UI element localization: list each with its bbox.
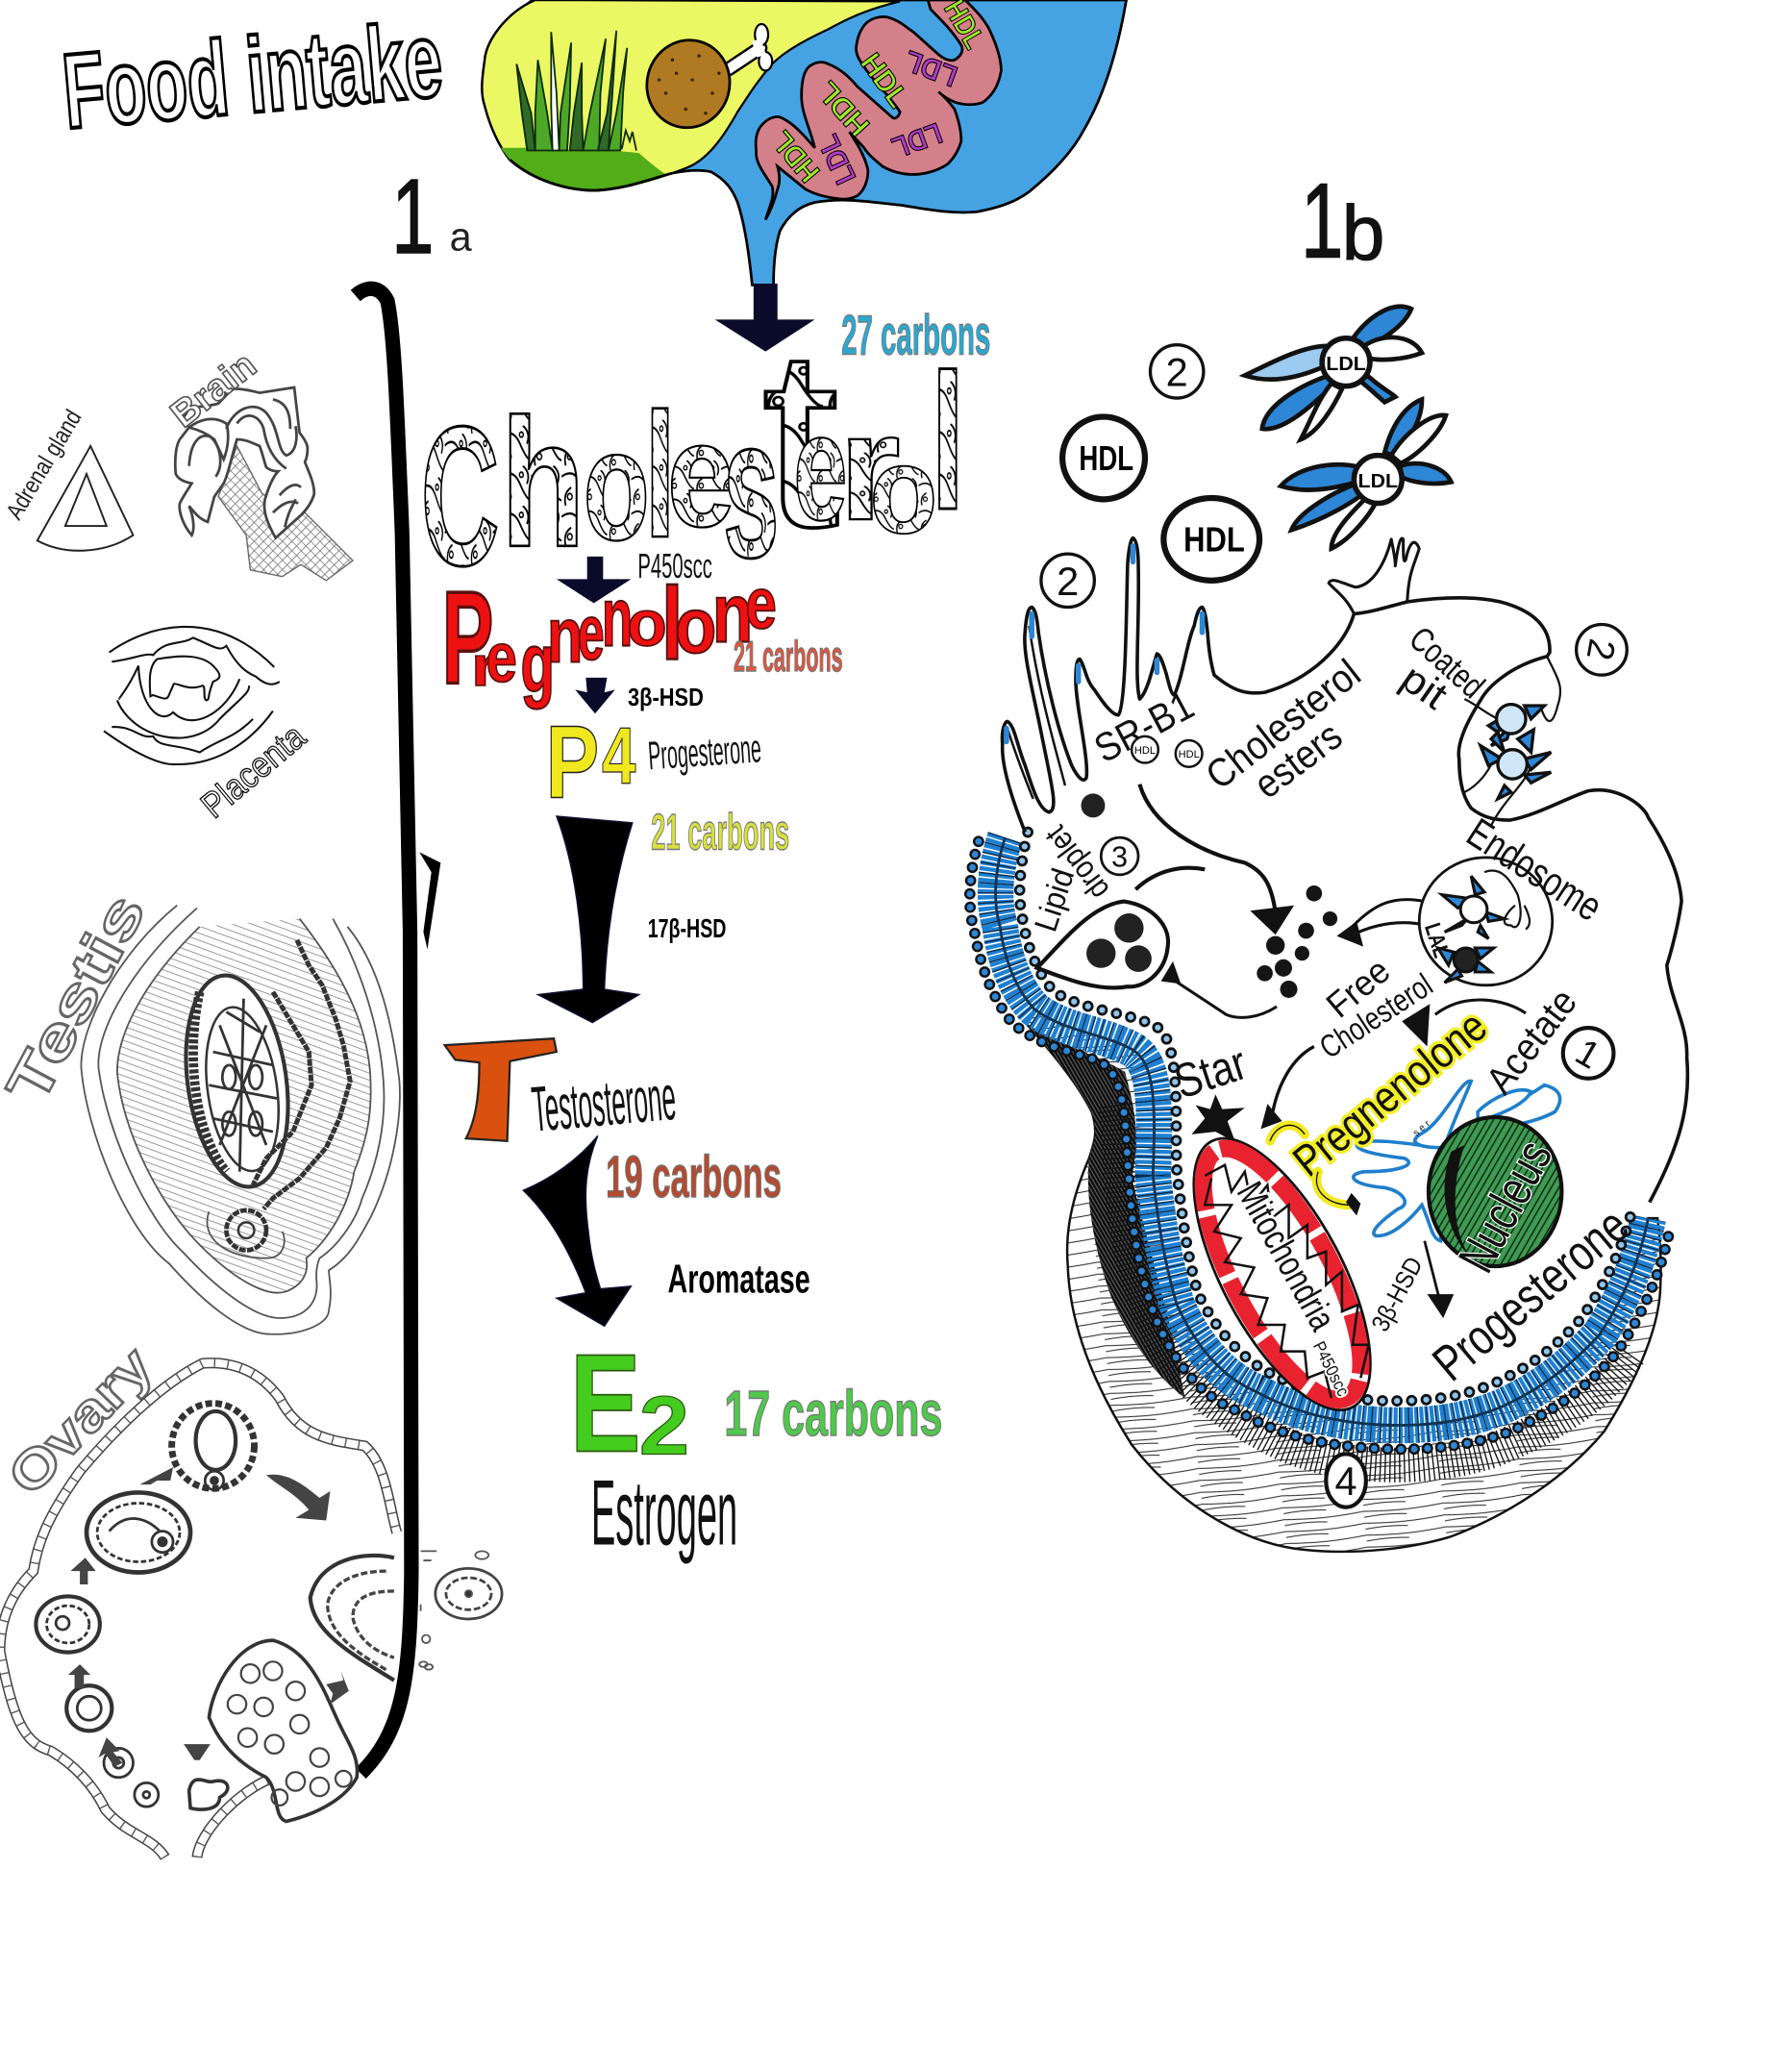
heading: Cholesterol: C [421,386,500,608]
hairy receptor tuft [1329,538,1419,613]
heading: P4: 4 [602,710,635,800]
label: Free Cholesterol: Free [1318,950,1398,1026]
icon: chicken leg [637,24,772,137]
nucleus [1411,1117,1563,1282]
heading: Pregnenolone: l [661,566,683,681]
mitochondrial cristae [1205,1165,1369,1378]
infographic: steroid hormone synthesis: 21 carbons [734,634,843,681]
heading: Pregnenolone: e [578,589,605,677]
number badge 1: 1 [1568,1032,1607,1078]
lipid droplet [1037,902,1168,987]
corpus luteum [209,1640,358,1821]
brain gyri [175,387,314,538]
label: Lipid droplet: Lipid [1028,864,1082,936]
HDL particle [1163,498,1259,581]
heading: Cholesterol: l [931,334,965,550]
number badge 3 [1101,837,1138,875]
heading 1a: a [450,213,473,259]
label: LAL: LAL [1420,920,1455,960]
brain hatched stem [218,446,353,581]
dark hatched shoulder [1025,1023,1185,1398]
label: Star: Star [1168,1035,1253,1109]
tissue: brain [163,344,353,581]
intestine [756,0,1001,220]
label: Coated pit: Coated [1402,618,1493,706]
HDL particle: HDL [1183,519,1245,559]
heading: Cholesterol: r [838,383,901,552]
icon: grass [516,31,636,151]
number badge 4 [1326,1454,1366,1507]
arrows to free cholesterol pool [1135,785,1526,1129]
yellow curved arrows [1270,1125,1360,1215]
heading: E2: E [570,1326,641,1482]
heading: Cholesterol [421,295,965,608]
label: adrenal gland: Adrenal gland [1,406,87,524]
label: 21 carbons yellow: 21 carbons [651,805,789,861]
label: 19 carbons: 19 carbons [606,1144,782,1209]
intestine labels HDL and LDL: HDL [810,75,876,142]
small HDL particles: HDL [1134,745,1156,757]
heading 1a: 1 [391,158,434,276]
small HDL particles: HDL [1179,749,1200,760]
stomach yellow region [482,0,900,190]
label: Coated pit: pit [1393,655,1456,718]
tissue: testis [0,884,400,1334]
HDL particle: HDL [1079,438,1133,478]
label: Acetate: Acetate [1478,981,1585,1102]
intestine labels HDL and LDL: LDL [811,130,862,189]
number badges 2 [1041,345,1627,675]
heading 1b: 1 [1301,162,1343,280]
heading: Cholesterol: e [667,392,735,559]
heading: Pregnenolone: P [442,563,493,711]
heading: Pregnenolone: r [471,635,497,698]
heading: Pregnenolone: e [746,564,777,644]
cell membrane bilayer [970,833,1671,1449]
smooth ER [1354,1081,1560,1241]
heading: Cholesterol: h [501,382,585,585]
arrow: cholesterol to pregnenolone [557,557,631,603]
tissue: adrenal gland [1,406,133,551]
heading: T [445,1038,557,1141]
heading: E2 [570,1326,689,1482]
infographic: steroid hormone synthesis: Testosterone [529,1062,679,1146]
lipid droplet dark dot [1081,793,1105,817]
epididymis [253,940,350,1208]
label: 3β-HSD in cell: 3β-HSD [1365,1252,1429,1336]
heading: Pregnenolone: o [627,588,667,660]
free HDL particles [1062,416,1259,581]
LDL in endosome [1438,876,1505,983]
hatch under membrane [1115,1105,1630,1465]
icon: star [1191,1094,1245,1142]
number badges 2: 2 [1166,350,1188,395]
infographic: steroid hormone synthesis: Progesterone [647,725,762,778]
arrow: food to cholesterol [715,284,815,352]
icon: adrenal triangle [37,446,133,551]
heading 1b [1301,162,1384,280]
label: Nucleus: Nucleus [1448,1132,1563,1282]
arrow: pregnenolone to progesterone [575,678,615,713]
label: Cholesterol esters: esters [1245,712,1350,807]
intestine labels HDL and LDL: HDL [854,47,915,113]
blue lipid tails [996,837,1648,1425]
number badge 3: 3 [1111,841,1128,874]
free cholesterol dots [1257,885,1337,998]
icon: placenta animal [150,657,219,700]
heading: Cholesterol: o [869,422,937,560]
villus blue tips [1007,546,1203,741]
intestine labels HDL and LDL: LDL [901,44,961,92]
heading: Cholesterol: o [584,397,650,573]
bracket [356,288,440,1774]
corpus albicans [189,1780,228,1809]
nucleus: ser [1411,1118,1432,1138]
label: P450scc: P450scc [637,546,712,586]
LDL particle top: LDL [1326,353,1366,375]
intestine labels HDL and LDL: HDL [765,125,826,188]
heading: E2: 2 [639,1380,689,1472]
label: 17β-HSD: 17β-HSD [648,913,726,943]
heading: Pregnenolone: n [547,592,583,679]
placenta outlines [104,627,274,764]
heading: P4: P [546,705,599,820]
heading: P4 [546,705,635,820]
arrow: to progesterone in cell [1425,1241,1454,1318]
number badges 2: 2 [1057,559,1079,604]
label: Endosome: Endosome [1458,810,1610,931]
arrow: progesterone to testosterone [537,816,639,1023]
heading: Pregnenolone: g [520,616,555,709]
label: Free Cholesterol: Cholesterol [1314,967,1439,1066]
label: P450scc mitochondrial: P450scc [1309,1338,1353,1399]
LDL particle top [1245,307,1422,439]
label: Cholesterol esters: Cholesterol [1197,650,1369,798]
HDL particle [1062,416,1145,499]
label: Placenta: Placenta [193,715,313,826]
label: Aromatase: Aromatase [667,1257,810,1302]
follicle progress arrows [68,1467,349,1767]
outer phospholipid heads [970,841,1671,1449]
label: 17 carbons: 17 carbons [724,1379,942,1450]
endosome receptor [1484,870,1530,930]
infographic: steroid hormone synthesis: Estrogen [591,1459,737,1564]
number badges 2: 2 [1579,635,1623,663]
heading 1b: b [1342,190,1384,277]
label: SR-B1: SR-B1 [1086,682,1201,771]
label: Pregnenolone in cell: Pregnenolone [1283,1001,1496,1185]
heading: Cholesterol: e [793,383,848,553]
tissue: ovary [0,1335,502,1857]
heading: Pregnenolone [442,563,777,711]
stomach with food [482,0,1127,285]
LDL in coated pit [1481,705,1551,799]
mitochondrion [1158,1113,1406,1435]
small HDL particles [1132,736,1203,767]
coated pit receptors [1464,657,1560,826]
LDL particle lower [1281,399,1451,549]
heading 1a [391,158,473,276]
cell surface outline with villi and coated pit [1003,538,1687,1203]
endosome [1419,858,1553,985]
label: Mitochondria: Mitochondria [1229,1175,1344,1337]
ruptured follicle [311,1556,394,1681]
cell bowl cytoplasm [1025,1009,1660,1552]
inner phospholipid heads [1020,833,1630,1401]
released oocyte [436,1568,502,1619]
label: Ovary: Ovary [0,1335,164,1507]
label: 27 carbons: 27 carbons [841,304,990,366]
label: 3β-HSD: 3β-HSD [628,683,704,711]
stomach green patch [501,148,668,190]
label: Brain: Brain [163,344,264,436]
number badge 1 [1563,1028,1613,1079]
intestine labels HDL and LDL [765,0,991,189]
arrow: testosterone to estradiol [523,1135,631,1326]
label: Progesterone in cell: Progesterone [1423,1197,1639,1392]
testis lobules [173,969,301,1193]
follicle stages [36,1404,255,1806]
heading: Cholesterol: s [723,376,780,599]
label: Lipid droplet [1028,819,1116,936]
testis outer wall [81,906,400,1334]
stomach blue body [482,0,1127,285]
LDL particle lower: LDL [1358,470,1398,492]
heading: Cholesterol: t [761,295,840,580]
heading: Pregnenolone: n [602,573,633,664]
heading: Pregnenolone: n [712,566,753,660]
intestine labels HDL and LDL: LDL [887,116,946,164]
label: Lipid droplet: droplet [1038,819,1116,906]
heading: Pregnenolone: e [485,619,517,696]
heading: Pregnenolone: o [675,583,716,670]
number badge 4: 4 [1335,1458,1357,1504]
heading: Cholesterol: l [644,376,676,574]
ovary wall [0,1363,397,1857]
tissue: placenta [104,627,313,826]
